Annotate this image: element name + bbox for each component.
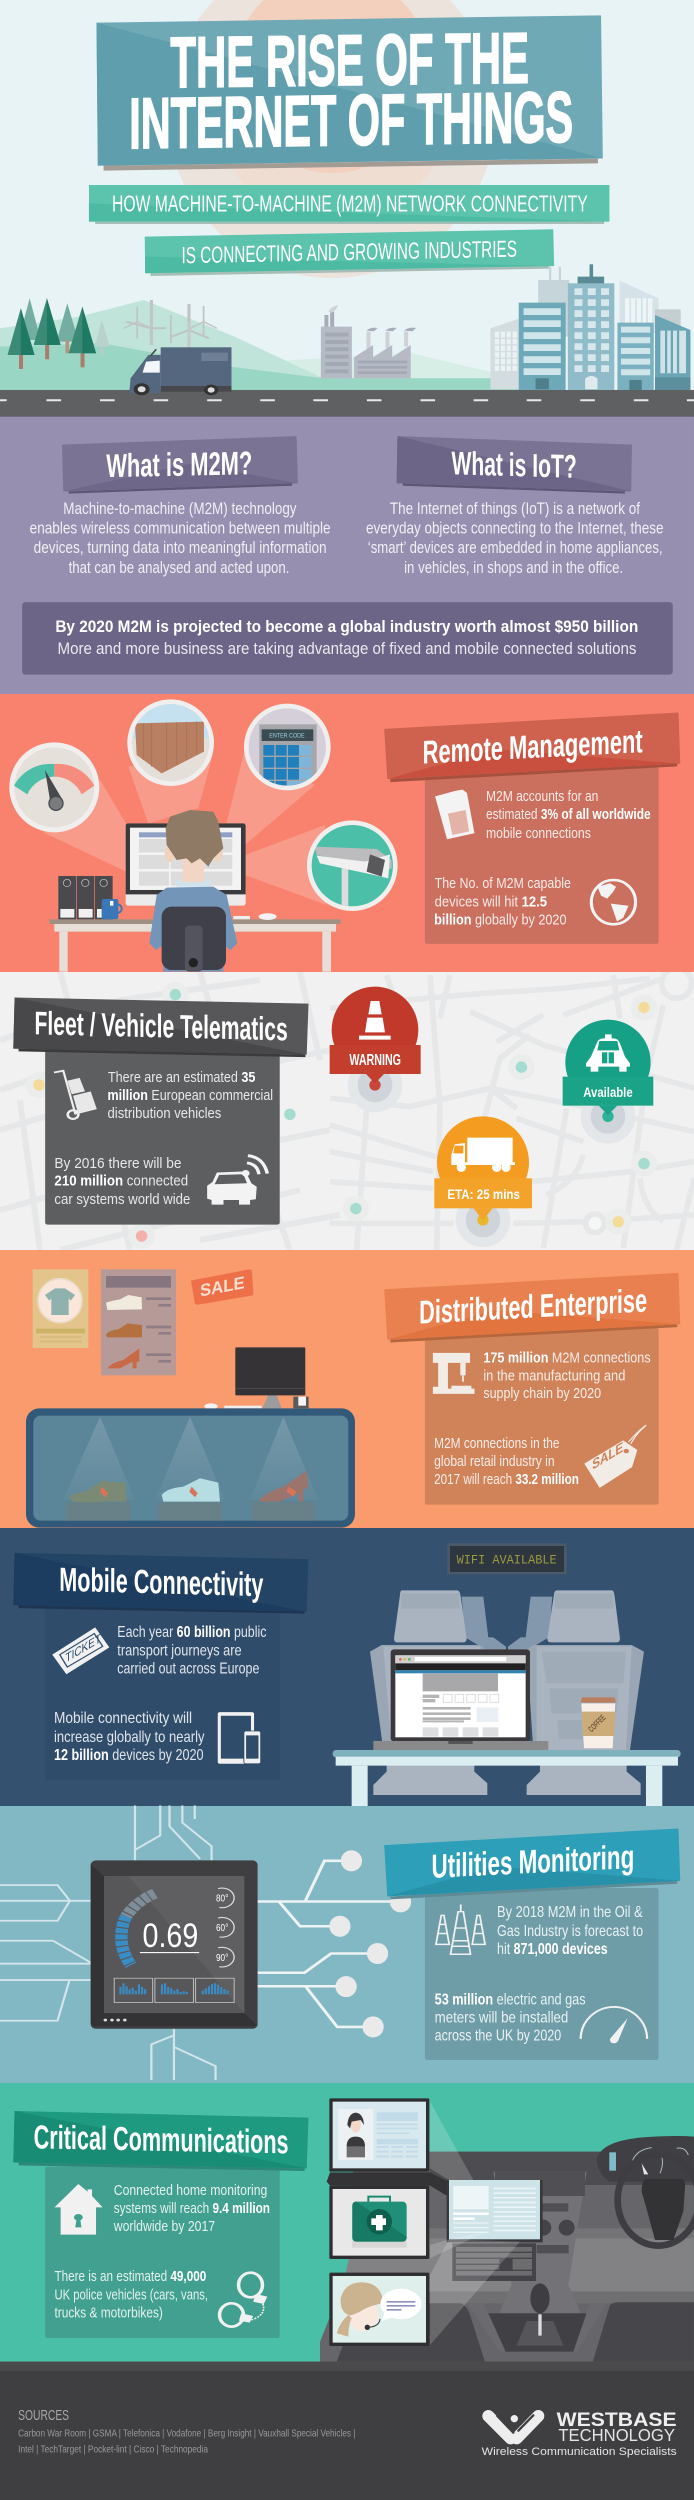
sources: Intel | TechTarget | Pocket-lint | Cisco | Technopedia [18, 2444, 208, 2455]
text: M2M definition: Machine-to-machine (M2M) technology [63, 499, 297, 517]
smart meter device [91, 1860, 258, 2029]
front seats [337, 2303, 485, 2362]
icon: manufacturing machine [433, 1353, 474, 1394]
screen: call operator [329, 2273, 429, 2346]
text: M2M definition [30, 499, 331, 576]
icon: taxi [586, 1034, 630, 1072]
heading: What is M2M?: What is M2M? [106, 445, 252, 484]
icon: hand trolley [54, 1071, 96, 1119]
stat: 53 million: meters will be installed [435, 2009, 568, 2026]
sale sign [191, 1269, 253, 1305]
stat: 60 billion: Each year 60 billion public [117, 1624, 267, 1641]
map marker dots [26, 982, 657, 1249]
till monitor [204, 1347, 309, 1409]
map pin: ETA truck [434, 1116, 532, 1247]
icon: handcuffs [220, 2273, 267, 2327]
temperature dials: 90° [216, 1953, 228, 1963]
gear stick [517, 2321, 563, 2346]
stat: 175 million: supply chain by 2020 [483, 1385, 601, 1402]
header scene background [0, 0, 694, 392]
heading: What is IoT?: What is IoT? [451, 445, 577, 485]
illustration: train seats with laptop [333, 1543, 681, 1807]
panel: distributed enterprise background [0, 1250, 694, 1528]
title text [129, 17, 573, 164]
stat: 175 million [483, 1349, 651, 1402]
circuit lines [0, 1806, 216, 2080]
dashboard [320, 2152, 694, 2362]
front seats [370, 1590, 644, 1795]
logo: Westbase Technology: WESTBASE [557, 2410, 677, 2431]
stat: 35 million: million European commercial [108, 1087, 273, 1104]
sun [168, 0, 496, 278]
computer monitor [126, 823, 246, 906]
landscape [0, 264, 694, 416]
panel: fleet telematics map background [0, 968, 694, 1250]
stat: 9.4 million: worldwide by 2017 [113, 2217, 215, 2234]
desk [49, 919, 341, 972]
stat: 3 percent: mobile connections [486, 825, 591, 841]
light beams [43, 748, 327, 905]
shoes poster [101, 1269, 176, 1375]
heading: Mobile Connectivity: Mobile Connectivity [59, 1560, 264, 1603]
stat: 49,000: UK police vehicles (cars, vans, [54, 2286, 208, 2303]
icon: tablet and phone [218, 1712, 261, 1764]
city skyline [490, 264, 690, 390]
stat: 12.5 billion [434, 875, 571, 928]
centre screen and keyboard [327, 2172, 543, 2281]
icon: ticket [52, 1627, 109, 1674]
stat: 3 percent: M2M accounts for an [486, 788, 598, 805]
bar charts [114, 1978, 234, 2003]
panel: what is M2M and IoT [0, 416, 694, 694]
illustration: smart meter network [0, 1806, 411, 2080]
stat: 9.4 million: Connected home monitoring [114, 2181, 267, 2198]
screen: first aid kit [329, 2186, 429, 2259]
display counter [26, 1408, 355, 1528]
sources: SOURCES [18, 2406, 69, 2423]
icon: traffic cone [359, 1001, 391, 1040]
stat: 33.2 million: 2017 will reach 33.2 million [434, 1471, 579, 1487]
panel: critical communications stats [13, 2111, 308, 2338]
text: M2M definition: that can be analysed and acted upon. [69, 558, 289, 576]
sale sign: SALE [200, 1272, 245, 1301]
steering and instrument cluster [597, 2136, 694, 2246]
stat: 60 billion [117, 1624, 267, 1677]
stat: 210 million [54, 1155, 190, 1207]
icon: connected car [207, 1156, 267, 1205]
heading: Fleet / Vehicle Telematics: Fleet / Vehicle Telematics [35, 1005, 288, 1048]
stat: 12.5 billion: The No. of M2M capable [435, 875, 571, 891]
coffee cup: COFFEE [586, 1712, 608, 1734]
stat: 60 billion: transport journeys are [117, 1642, 242, 1659]
temperature dials: 80° [216, 1893, 228, 1904]
icon: keypad bubble: ENTER CODE [269, 733, 305, 740]
rear seats [462, 1597, 552, 1650]
sources [18, 2406, 355, 2455]
binders and mug [58, 876, 122, 919]
stat: 175 million: 175 million M2M connections [483, 1349, 651, 1366]
callout: $950 billion [22, 602, 673, 675]
icon: oil rigs [436, 1904, 485, 1954]
icon: meter gauge [581, 2007, 647, 2043]
title banner [96, 15, 603, 171]
stat: 210 million: 210 million connected [54, 1172, 188, 1189]
icon: shipping container bubble [127, 699, 217, 786]
text: M2M definition: enables wireless communication between multiple [30, 518, 331, 537]
map pin: available taxi: Available [583, 1084, 633, 1100]
stat: 210 million: By 2016 there will be [54, 1155, 181, 1171]
subtitle banner 1 [89, 185, 609, 224]
status dots [104, 2019, 127, 2021]
road [0, 390, 694, 416]
reading: 0.69 [143, 1916, 198, 1955]
stat: 12 billion: 12 billion devices by 2020 [54, 1747, 204, 1764]
heading: Utilities Monitoring [384, 1828, 680, 1899]
heading: Fleet / Vehicle Telematics [13, 997, 308, 1057]
light beams [430, 2102, 520, 2345]
stat: 12.5 billion: billion globally by 2020 [434, 911, 567, 928]
panel: mobile connectivity background [0, 1528, 694, 1806]
wifi sign [447, 1543, 567, 1574]
icon: truck [451, 1138, 515, 1165]
network nodes [329, 1850, 411, 2037]
stat: 49,000: trucks & motorbikes) [54, 2304, 163, 2321]
logo: Westbase Technology [482, 2410, 677, 2458]
delivery van [129, 322, 231, 395]
heading: Mobile Connectivity [13, 1553, 308, 1614]
illustration: vehicle dashboard with screens [320, 2098, 694, 2362]
logo: Westbase Technology: TECHNOLOGY [558, 2425, 675, 2445]
gauge arc [121, 1894, 155, 1965]
shirt poster [33, 1269, 88, 1348]
temperature dials: 60° [216, 1923, 228, 1934]
stat: 49,000: There is an estimated 49,000 [54, 2267, 206, 2284]
stat: 53 million [435, 1991, 586, 2044]
map pin: available taxi [563, 1020, 653, 1144]
stat: 60 billion: carried out across Europe [117, 1660, 259, 1677]
network connectors [258, 1861, 401, 2027]
coffee cup [581, 1697, 616, 1748]
icon: keypad bubble [243, 704, 331, 790]
stat: 35 million: distribution vehicles [108, 1105, 221, 1121]
panel: utilities monitoring background [0, 1806, 694, 2084]
stat: 33.2 million [434, 1435, 579, 1487]
map pin: ETA truck: ETA: 25 mins [447, 1186, 520, 1202]
stat: 53 million: across the UK by 2020 [435, 2027, 561, 2044]
heading: Remote Management [384, 712, 680, 782]
stat: 9.4 million: systems will reach 9.4 million [114, 2199, 270, 2216]
keyboard and mouse [233, 913, 277, 920]
screen: suspect profile [329, 2098, 429, 2172]
illustration: worker at monitoring desk [9, 699, 398, 972]
factory [321, 305, 416, 378]
map pin: warning [330, 987, 421, 1112]
panel: mobile connectivity stats [13, 1553, 308, 1780]
stat: 49,000 [54, 2267, 208, 2321]
icon: gauge bubble [9, 742, 99, 832]
heading: Critical Communications [13, 2111, 308, 2171]
panel: utilities monitoring stats [384, 1828, 680, 2060]
stat: 53 million: 53 million electric and gas [435, 1991, 586, 2008]
text: M2M definition: devices, turning data into meaningful information [34, 538, 327, 557]
panel: distributed enterprise stats [384, 1273, 680, 1505]
panel: remote management background [0, 694, 694, 973]
icon: CCTV camera bubble [307, 820, 398, 911]
stat: 3 percent [486, 788, 651, 841]
hills [0, 300, 520, 392]
office chair [162, 907, 226, 972]
sources: Carbon War Room | GSMA | Telefonica | Vodafone | Berg Insight | Vauxhall Special Vehicles | [18, 2428, 355, 2439]
stat: 33.2 million: M2M connections in the [434, 1435, 559, 1452]
wifi sign: WIFI AVAILABLE [457, 1552, 557, 1567]
logo: Westbase Technology: Wireless Communication Specialists [482, 2446, 677, 2458]
map pin: warning: WARNING [349, 1052, 401, 1069]
stat: 12 billion: increase globally to nearly [54, 1728, 205, 1746]
icon: house with lock [54, 2184, 103, 2235]
heading: What is M2M? [62, 436, 298, 494]
panel: fleet telematics [13, 997, 308, 1225]
table [333, 1750, 681, 1807]
stat: 210 million: car systems world wide [54, 1191, 190, 1207]
panel: footer [0, 2362, 694, 2500]
panel: critical communications background [0, 2083, 694, 2363]
icon: ticket: TICKET [66, 1631, 101, 1666]
heading: What is IoT? [397, 436, 632, 494]
stat: 871,000 devices: hit 871,000 devices [497, 1941, 608, 1958]
stat: 35 million: There are an estimated 35 [108, 1069, 255, 1086]
stat: 33.2 million: global retail industry in [434, 1453, 555, 1470]
temperature dials [207, 1885, 238, 1970]
subtitle banner 2 [145, 229, 554, 276]
stat: 12 billion [54, 1710, 205, 1764]
panel: remote management stats [384, 712, 680, 944]
stat: 35 million [108, 1069, 273, 1121]
stat: 9.4 million [113, 2181, 270, 2234]
heading: Distributed Enterprise [384, 1273, 680, 1342]
icon: sale tag [584, 1425, 646, 1488]
stat: 871,000 devices [497, 1904, 643, 1958]
icon: sale tag: SALE [592, 1438, 623, 1473]
stat: 175 million: in the manufacturing and [483, 1367, 625, 1384]
stat: 12 billion: Mobile connectivity will [54, 1710, 192, 1727]
trees [8, 298, 110, 369]
map streets right [330, 968, 694, 1250]
icon: SIM card [435, 790, 474, 839]
illustration: retail shop [26, 1269, 355, 1528]
laptop [373, 1649, 548, 1750]
text: IoT definition [366, 499, 663, 576]
icon: globe [591, 880, 636, 924]
heading: Critical Communications: Critical Communications [34, 2119, 289, 2161]
worker [149, 810, 237, 972]
wind turbines [124, 300, 217, 347]
stat: 12.5 billion: devices will hit 12.5 [435, 893, 547, 910]
